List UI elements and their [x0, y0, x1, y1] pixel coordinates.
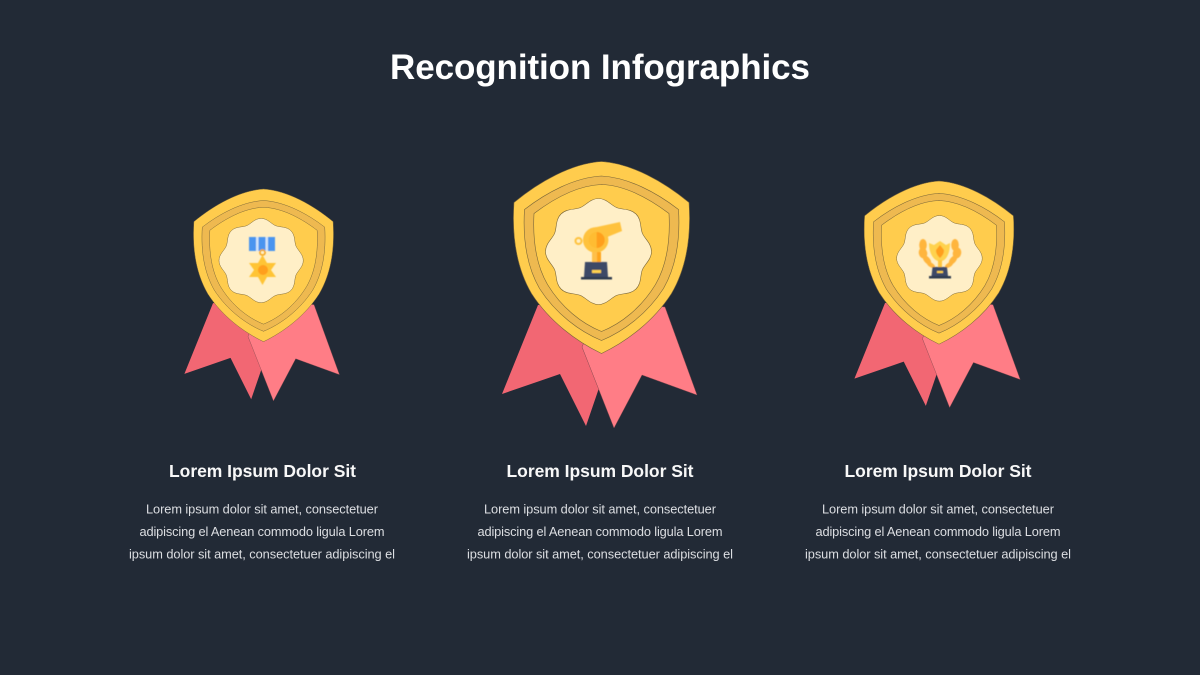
text block: ipsum dolor sit amet, consectetuer adipiscing el — [805, 546, 1071, 562]
text block — [805, 502, 1071, 562]
title: Recognition Infographics — [390, 48, 810, 87]
panel: centre recognition badge — [467, 162, 733, 562]
heading: Lorem Ipsum Dolor Sit — [844, 461, 1032, 481]
text block: adipiscing el Aenean commodo ligula Lorem — [478, 524, 722, 539]
icon: medal with star — [249, 237, 276, 285]
badge: right shield with ribbons — [854, 181, 1020, 408]
text block — [467, 502, 733, 562]
panel: right recognition badge — [805, 181, 1071, 562]
panel: left recognition badge — [129, 189, 395, 562]
text block: adipiscing el Aenean commodo ligula Lorem — [816, 524, 1060, 539]
heading: Lorem Ipsum Dolor Sit — [506, 461, 694, 481]
text block — [129, 502, 395, 562]
icon: whistle trophy — [576, 222, 622, 280]
badge: centre shield with ribbons — [502, 162, 697, 428]
text block: adipiscing el Aenean commodo ligula Lorem — [140, 524, 384, 539]
text block: ipsum dolor sit amet, consectetuer adipiscing el — [129, 546, 395, 562]
text block: ipsum dolor sit amet, consectetuer adipiscing el — [467, 546, 733, 562]
text block: Lorem ipsum dolor sit amet, consectetuer — [484, 502, 717, 516]
heading: Lorem Ipsum Dolor Sit — [169, 461, 356, 481]
text block: Lorem ipsum dolor sit amet, consectetuer — [146, 502, 379, 516]
badge: left shield with ribbons — [184, 189, 339, 401]
text block: Lorem ipsum dolor sit amet, consectetuer — [822, 502, 1055, 516]
icon: trophy with laurels — [918, 239, 962, 278]
